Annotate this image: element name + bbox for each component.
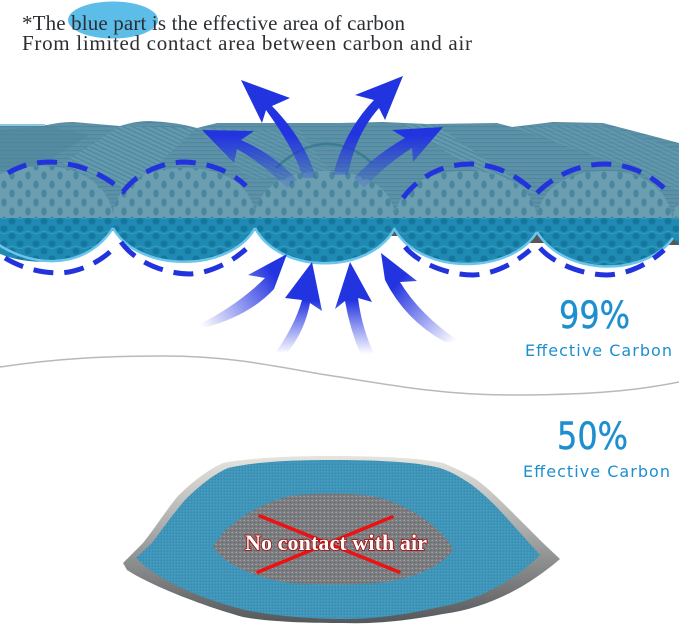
upper dashed outlines — [8, 162, 664, 198]
stat: 99% effective carbon — [525, 294, 672, 360]
wave divider — [0, 356, 679, 395]
pillow outer edge — [123, 456, 560, 623]
light blue underside rim — [0, 228, 673, 267]
heading line 2: From limited contact area between carbon and air — [22, 31, 472, 55]
arrows: air flowing up and out — [202, 76, 443, 188]
cushion back rolls — [0, 121, 679, 222]
caption: Effective Carbon — [525, 341, 672, 360]
panel: mesh cushion — [0, 76, 679, 358]
heading line 1: *The blue part is the effective area of carbon — [22, 11, 406, 35]
pillow blue carbon area — [136, 460, 540, 619]
stat: 50% effective carbon — [523, 415, 670, 481]
cushion cross-section cells — [0, 166, 679, 266]
panel: standard pillow — [123, 456, 560, 623]
label: no contact with air: No contact with air — [245, 530, 427, 555]
value: 50% — [557, 415, 628, 458]
pillow grey dead zone — [213, 493, 453, 584]
lower dashed outlines — [5, 242, 664, 275]
caption: Effective Carbon — [523, 462, 670, 481]
arrows: air flowing in from below — [198, 253, 460, 358]
cushion dark gaps between cells — [109, 222, 679, 245]
heading: explanatory note — [22, 2, 472, 55]
value: 99% — [559, 294, 630, 337]
red cross — [258, 516, 399, 572]
highlight: blue ellipse — [68, 2, 158, 38]
